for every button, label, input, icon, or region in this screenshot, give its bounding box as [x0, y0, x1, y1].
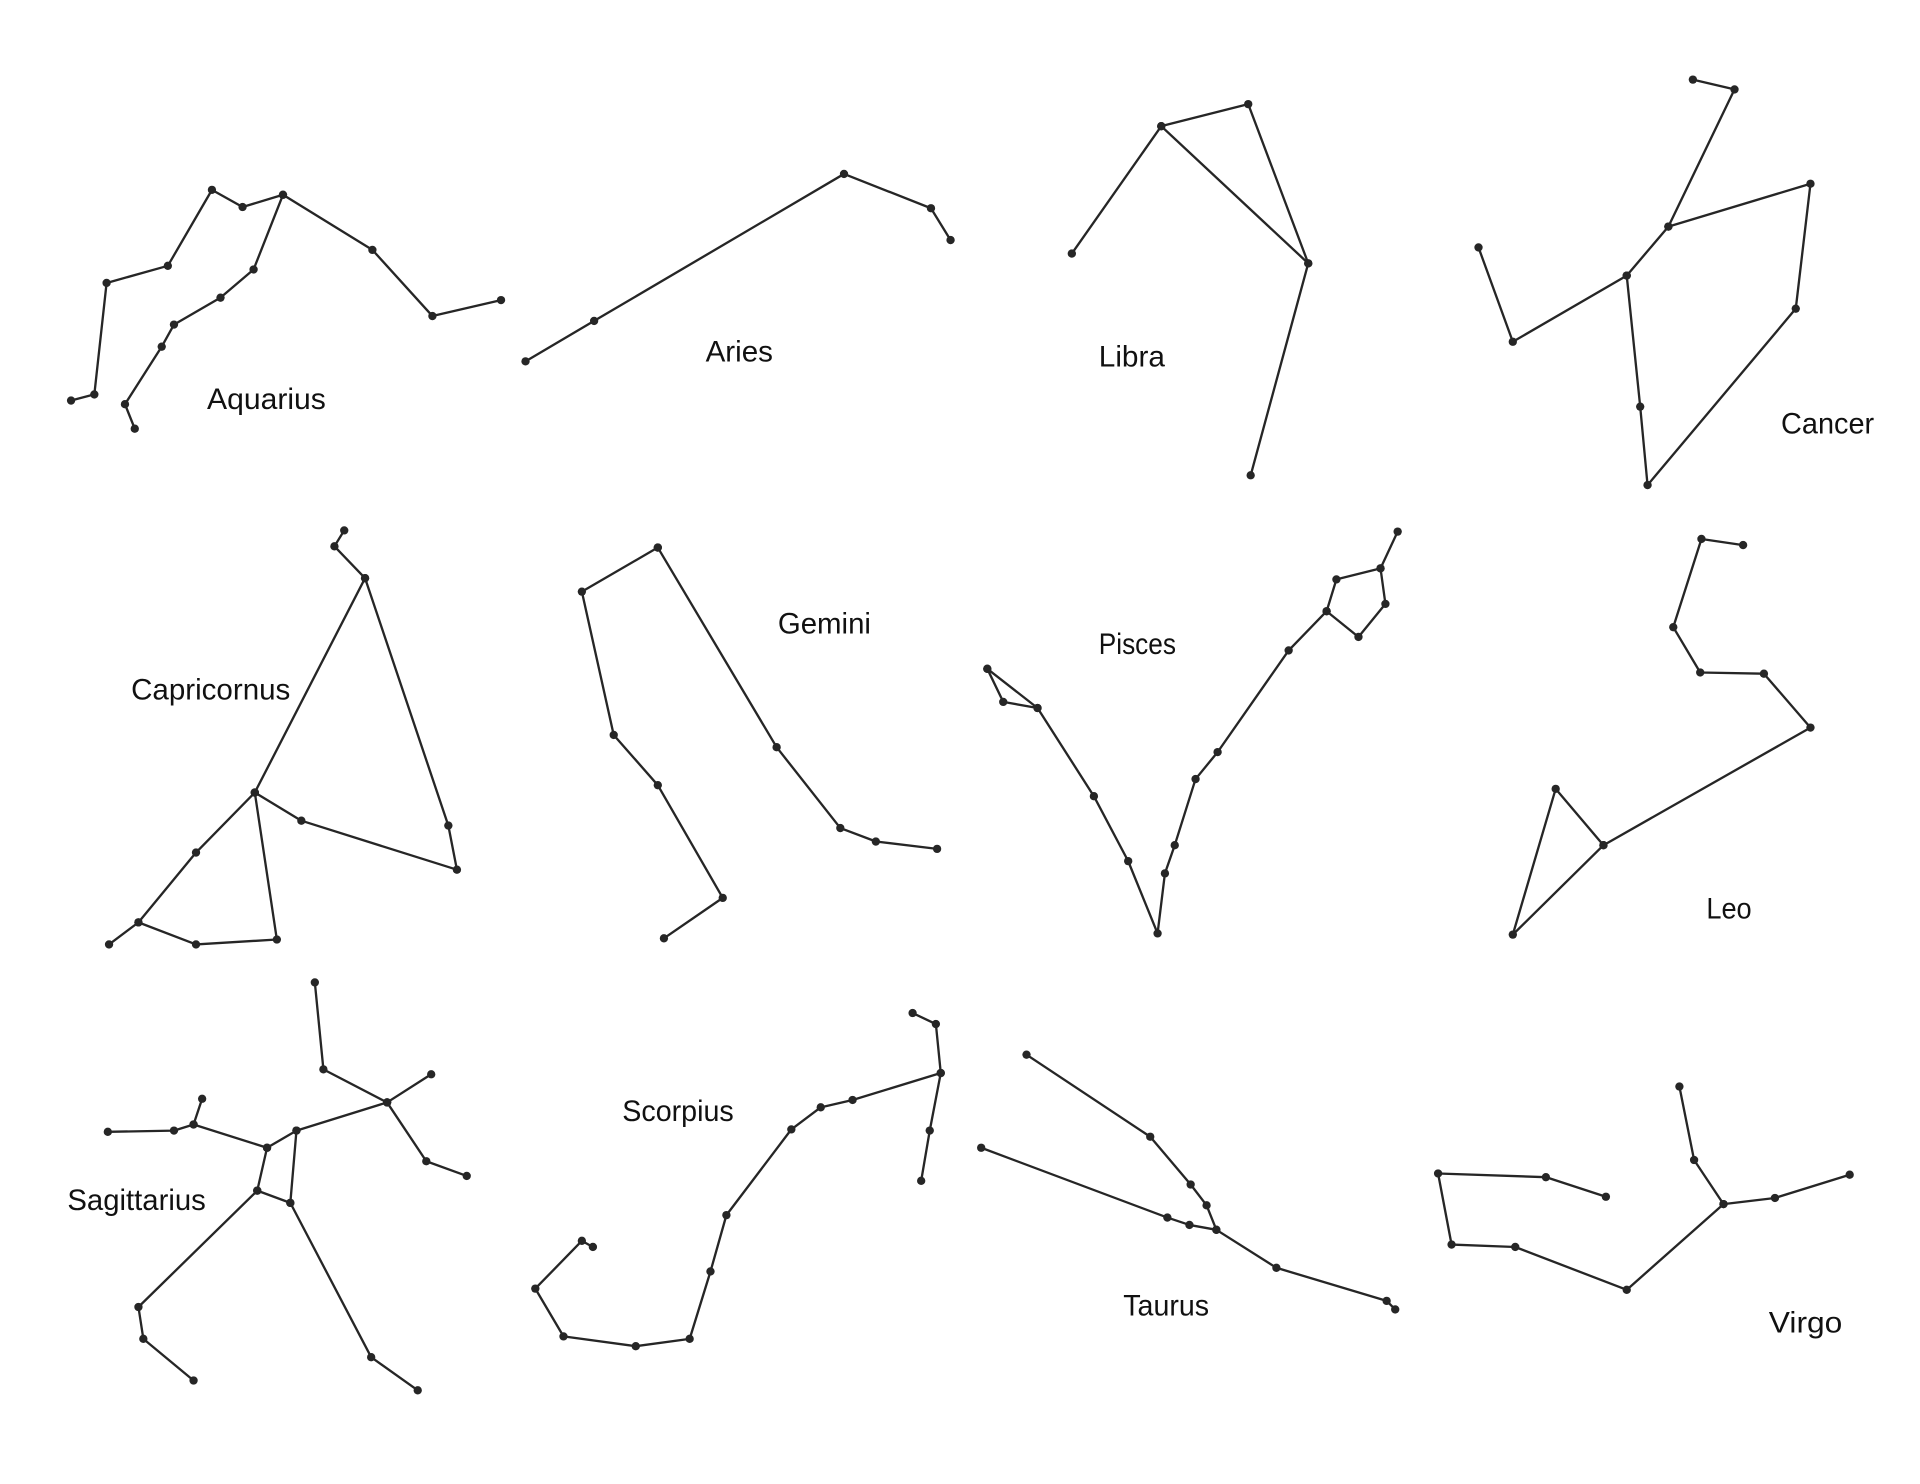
label: Gemini: Gemini: [778, 607, 871, 640]
label: Aquarius: Aquarius: [207, 383, 326, 416]
label: Taurus: Taurus: [1123, 1290, 1209, 1323]
label: Scorpius: Scorpius: [622, 1095, 734, 1128]
label: Libra: Libra: [1099, 340, 1166, 373]
constellation: Aries: [526, 174, 951, 368]
label: Leo: Leo: [1706, 893, 1752, 926]
label: Sagittarius: Sagittarius: [67, 1184, 206, 1217]
constellation: Cancer: [1479, 80, 1874, 485]
constellation: Virgo: [1438, 1087, 1850, 1340]
constellation: Capricornus: [109, 530, 457, 944]
label: Pisces: Pisces: [1099, 628, 1176, 661]
label: Virgo: Virgo: [1769, 1307, 1842, 1340]
label: Cancer: Cancer: [1781, 408, 1874, 441]
constellation: Aquarius: [71, 190, 501, 429]
constellation: Leo: [1513, 539, 1810, 935]
constellation: Pisces: [987, 532, 1398, 933]
constellation: Gemini: [582, 548, 937, 938]
constellation: Scorpius: [535, 1013, 941, 1346]
label: Aries: Aries: [706, 335, 773, 368]
constellation: Sagittarius: [67, 982, 467, 1390]
constellation: Taurus: [981, 1055, 1395, 1323]
label: Capricornus: Capricornus: [131, 673, 290, 706]
constellation: Libra: [1072, 104, 1308, 475]
